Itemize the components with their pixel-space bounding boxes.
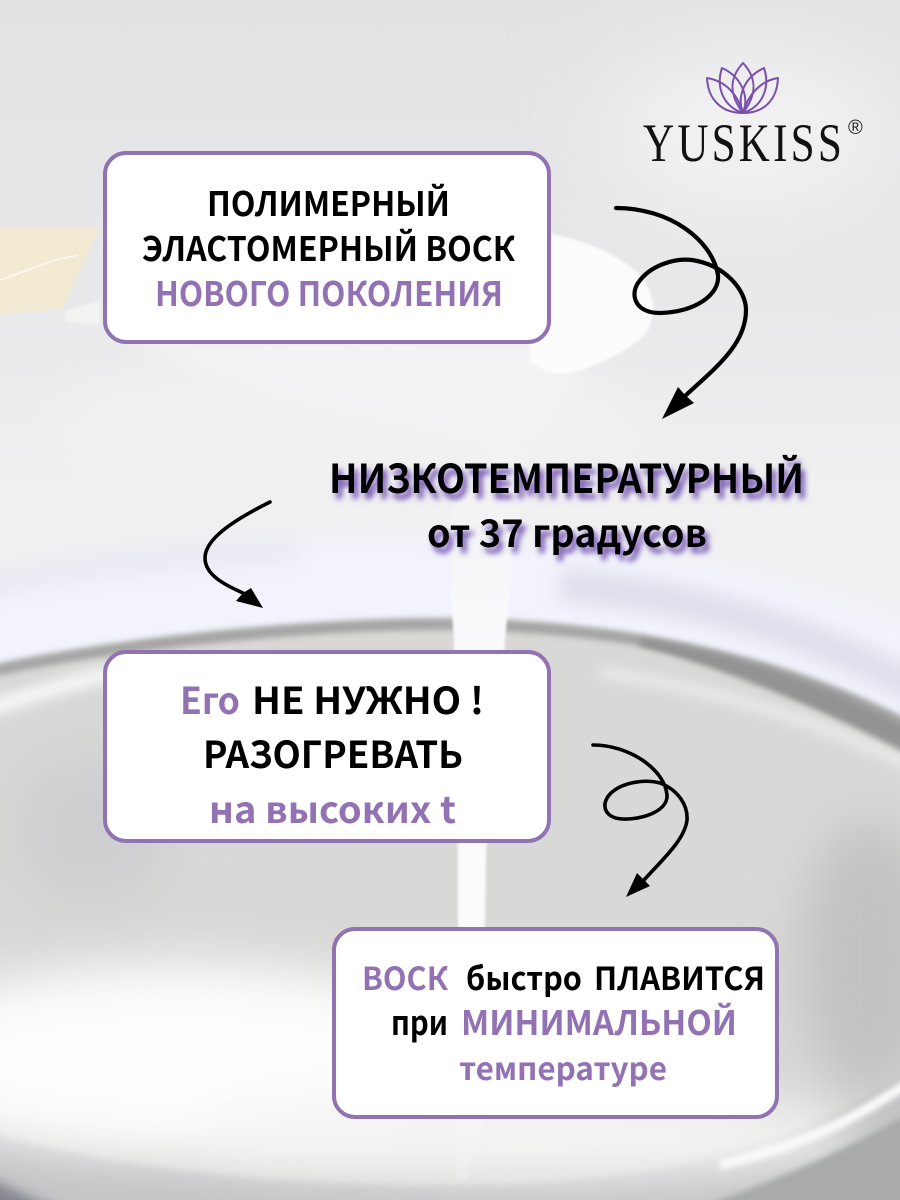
panel: melts at minimal temperature: ПЛАВИТСЯ [594, 954, 765, 1000]
panel: polymer wax [105, 153, 549, 342]
logo: YUSKISS: ® [848, 117, 863, 139]
rim bands [0, 624, 900, 738]
panel: polymer wax: ПОЛИМЕРНЫЙ [207, 177, 450, 226]
panel: no heating needed: НЕ НУЖНО ! [252, 671, 484, 725]
panel: no heating needed [105, 652, 549, 841]
can interior [0, 622, 900, 1185]
panel: no heating needed: РАЗОГРЕВАТЬ [203, 725, 463, 779]
logo: YUSKISS: YUSKISS [643, 113, 845, 173]
panel: melts at minimal temperature: МИНИМАЛЬНОЙ [461, 996, 737, 1045]
arrow 2 [205, 502, 270, 608]
logo: YUSKISS [643, 63, 863, 173]
arrow 1 [616, 208, 746, 419]
icon: lotus [707, 63, 778, 113]
spoon with wax [130, 232, 653, 441]
panel: melts at minimal temperature [334, 929, 777, 1117]
panel: no heating needed: на высоких t [209, 780, 456, 834]
heading: low temperature: от 37 градусов [427, 503, 707, 558]
wooden stick [0, 228, 100, 325]
arrow 3 [593, 745, 687, 897]
panel: melts at minimal temperature: быстро [466, 954, 582, 1000]
heading: low temperature [329, 447, 804, 558]
panel: polymer wax: ЭЛАСТОМЕРНЫЙ ВОСК [142, 222, 515, 271]
panel: melts at minimal temperature: при [391, 996, 448, 1045]
heading: low temperature: НИЗКОТЕМПЕРАТУРНЫЙ [329, 447, 804, 505]
panel: melts at minimal temperature: ВОСК [362, 954, 449, 1000]
panel: polymer wax: НОВОГО ПОКОЛЕНИЯ [155, 267, 503, 316]
panel: melts at minimal temperature: температуре [459, 1044, 667, 1089]
wax stream [450, 420, 535, 1180]
panel: no heating needed: Его [180, 671, 240, 725]
